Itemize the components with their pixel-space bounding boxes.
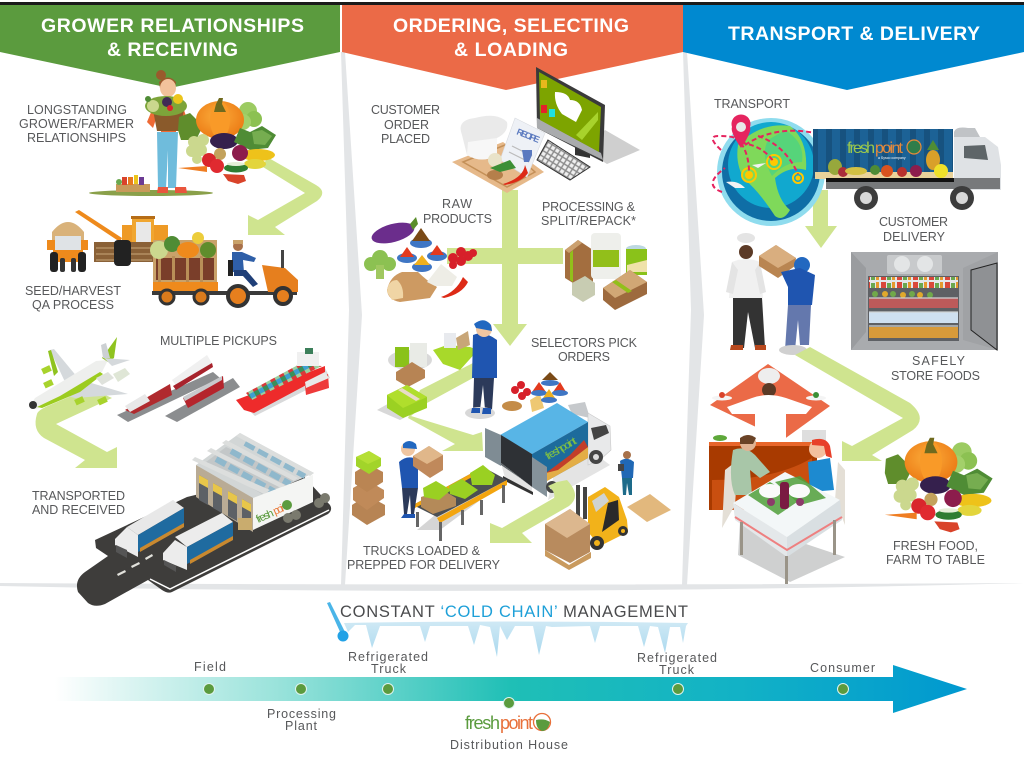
icon: farmer with basket [89,70,213,196]
icon: spices and foods [502,372,568,412]
timeline labels: Distribution House [450,738,568,752]
timeline labels: Field [194,660,226,674]
icon: delivery truck: freshpoint [544,435,579,463]
label: safely store: SAFELY [912,354,966,368]
label: raw products [423,197,492,226]
icon: vegetable pile [178,98,276,184]
icon: branded truck [813,128,1001,210]
label: seed harvest [25,284,121,312]
icon: trailer tractor with driver [150,232,298,306]
header: grower relationships [0,5,340,88]
icon: selector with boxes [433,320,497,419]
arrow: cross from order to selectors [447,190,563,346]
icon: empty pallet [627,494,671,522]
label: longstanding: RELATIONSHIPS [27,131,126,145]
label: longstanding: GROWER/FARMER [19,117,134,131]
label: longstanding [19,103,134,145]
label: customer order: PLACED [381,132,430,146]
header: transport [683,5,1024,90]
header: ordering: ORDERING, SELECTING [393,15,629,37]
label: processing: SPLIT/REPACK* [541,214,636,228]
label: fresh food: FARM TO TABLE [886,553,985,567]
label: longstanding: LONGSTANDING [27,103,127,117]
freshpoint logo [465,713,550,733]
label: processing [541,200,636,228]
label: trucks loaded: TRUCKS LOADED & [363,544,481,558]
icon: combine harvester [75,210,168,266]
timeline labels: Processing [267,707,336,721]
timeline labels: Refrigerated [637,651,717,665]
header: transport: TRANSPORT & DELIVERY [728,23,980,45]
icon: freight trains [117,355,240,422]
freshpoint logo: fresh [465,713,500,733]
label: trucks loaded: PREPPED FOR DELIVERY [347,558,501,572]
arrow: truck to chef [805,190,837,248]
panel separators [0,52,1024,591]
arrow: farmer to harvest [248,157,322,235]
timeline labels: Refrigerated [348,650,428,664]
timeline labels: Truck [659,663,695,677]
icon: goods stack [388,343,432,387]
label: multiple pickups: MULTIPLE PICKUPS [160,334,277,348]
header: grower relationships: GROWER RELATIONSHIPS [41,15,304,37]
icon: icicles [344,622,688,657]
icon: raw products [364,217,477,302]
timeline labels: Consumer [810,661,875,675]
freshpoint logo: point [500,713,533,733]
icon: globe with route [713,114,830,226]
cold chain title: CONSTANT ‘COLD CHAIN’ MANAGEMENT [340,603,688,621]
icon: warehouse and road [77,433,331,606]
icon: cargo plane [29,337,130,409]
icon: forklift [576,485,628,550]
icon: thermometer [327,602,348,642]
label: fresh food [886,539,985,567]
icon: harvester tractor [47,222,88,272]
icon: branded truck: a Sysco company [878,156,906,160]
icon: green package [377,385,427,420]
icon: small worker [618,451,634,495]
label: processing: PROCESSING & [542,200,636,214]
arrow: truck to delivery [490,480,575,543]
label: customer delivery [879,215,948,244]
label: customer order [371,103,440,146]
icon: conveyor with worker [399,441,507,541]
label: customer delivery: DELIVERY [883,230,946,244]
icon: delivery truck [485,402,611,500]
arrow: selector to truck [408,363,483,451]
label: selectors: SELECTORS PICK [531,336,638,350]
label: raw products: PRODUCTS [423,212,492,226]
icon: chef and delivery person [726,233,815,355]
icon: chopping board and recipe: RECIPE [515,127,541,145]
label: trucks loaded [347,544,501,572]
icon: pallet of boxes [545,509,591,570]
timeline labels [194,650,875,752]
icon: stacked boxes [352,451,385,525]
label: transported [32,489,125,517]
icon: warehouse and road: point [271,501,290,518]
timeline labels: Plant [285,719,318,733]
arrow: delivery to table [795,347,920,461]
icon: packaged goods [565,233,647,310]
label: transport: TRANSPORT [714,97,790,111]
icon: container ship [236,348,330,416]
icon: cold storage room [851,252,998,350]
label: selectors: ORDERS [558,350,610,364]
icon: branded truck: point [875,140,904,157]
label: safely store [891,354,980,383]
icon: branded truck: fresh [847,140,875,157]
label: fresh food: FRESH FOOD, [893,539,978,553]
header: grower relationships: & RECEIVING [107,39,238,61]
arrow: pickups to warehouse [36,388,117,468]
header: ordering [342,5,683,90]
header: ordering: & LOADING [454,39,568,61]
label: seed harvest: QA PROCESS [32,298,114,312]
icon: chopping board and recipe [452,116,545,193]
icon: fresh food pile [885,438,993,532]
label: transported: AND RECEIVED [32,503,125,517]
label: customer order: ORDER [384,118,429,132]
label: customer order: CUSTOMER [371,103,440,117]
timeline labels: Truck [371,662,407,676]
label: seed harvest: SEED/HARVEST [25,284,121,298]
label: transported: TRANSPORTED [32,489,125,503]
icon: chef and diners [709,364,845,584]
top black rule [0,2,1024,5]
label: safely store: STORE FOODS [891,369,980,383]
icon: computer [536,67,640,180]
label: selectors [531,336,638,364]
label: raw products: RAW [442,197,472,211]
label: customer delivery: CUSTOMER [879,215,948,229]
icon: warehouse and road: fresh [254,507,276,526]
timeline dots [204,684,848,708]
timeline arrow [55,665,967,713]
